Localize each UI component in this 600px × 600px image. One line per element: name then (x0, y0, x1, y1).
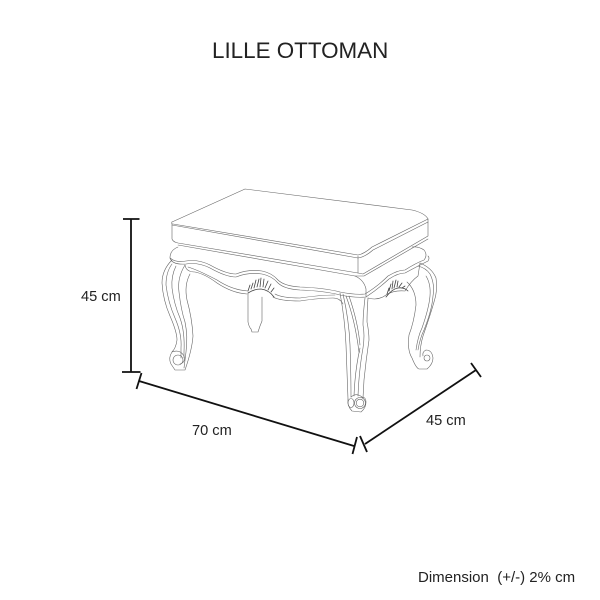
seat cushion (172, 189, 428, 276)
carving: centre fan (248, 278, 274, 297)
back left leg (248, 293, 262, 332)
dimension tolerance note: Dimension (+/-) 2% cm (418, 569, 575, 586)
width label: 70 cm (192, 423, 232, 439)
dimension line: height (122, 219, 140, 372)
carving: right fan (386, 280, 408, 297)
depth label: 45 cm (426, 413, 466, 429)
front left leg (162, 260, 193, 370)
dimension line: depth (360, 363, 481, 452)
back right leg (407, 263, 437, 369)
title: LILLE OTTOMAN (212, 38, 388, 63)
ottoman line drawing (162, 189, 437, 412)
dimension line: width (136, 373, 357, 454)
front centre leg (340, 293, 369, 412)
seat frame and apron (170, 247, 429, 304)
height label: 45 cm (81, 289, 121, 305)
